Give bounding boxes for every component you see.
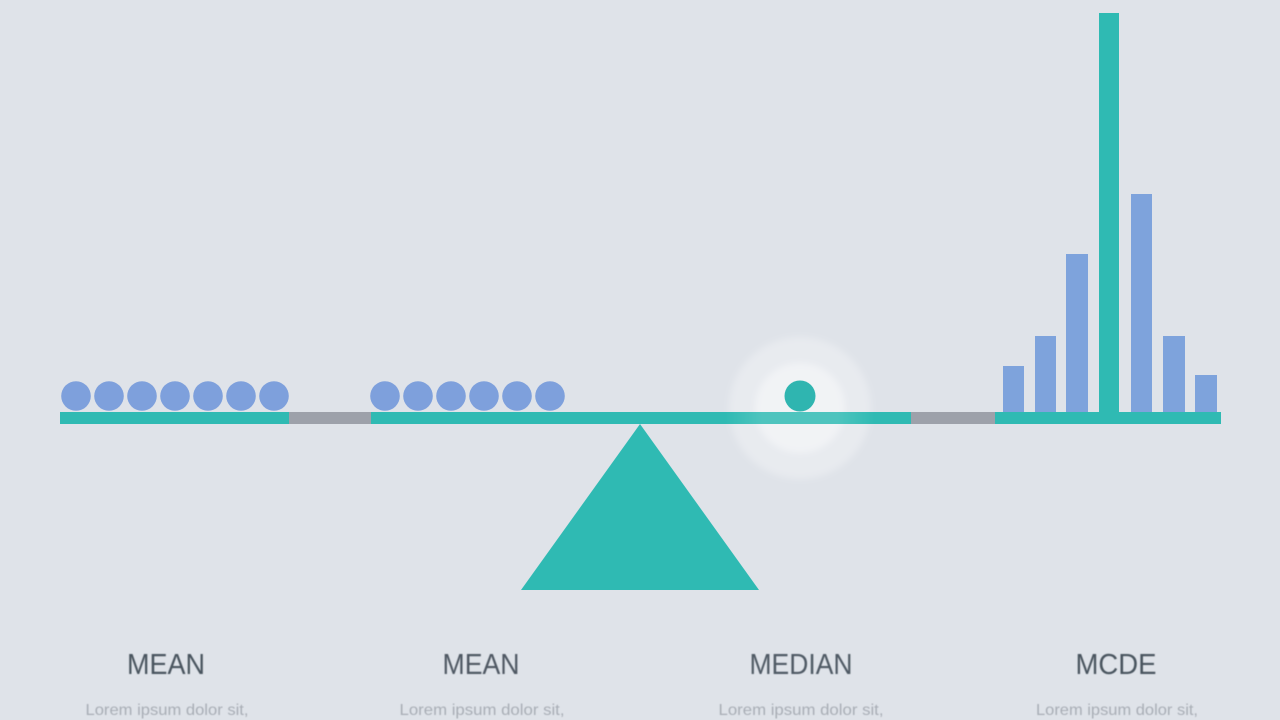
median highlight glow (729, 337, 871, 479)
column: median: Lorem ipsum dolor sit, (718, 702, 884, 719)
column: mean left (86, 649, 249, 719)
column: mode (1036, 649, 1198, 719)
column: median (718, 649, 884, 719)
triangle fulcrum (521, 424, 759, 590)
column: median: MEDIAN (750, 649, 852, 681)
column: mean right: Lorem ipsum dolor sit, (400, 702, 564, 719)
column: mode: MCDE (1076, 649, 1156, 681)
column: mean right: MEAN (442, 649, 520, 681)
median circle (784, 380, 816, 412)
column: mean right (400, 649, 564, 719)
column: mean left: MEAN (127, 649, 205, 681)
mode bar chart (1003, 13, 1217, 412)
mean circles: right group (370, 381, 565, 411)
column: mean left: Lorem ipsum dolor sit, (86, 702, 249, 719)
column: mode: Lorem ipsum dolor sit, (1036, 702, 1198, 719)
balance beam (60, 412, 1221, 424)
mean circles: left group (61, 381, 289, 411)
